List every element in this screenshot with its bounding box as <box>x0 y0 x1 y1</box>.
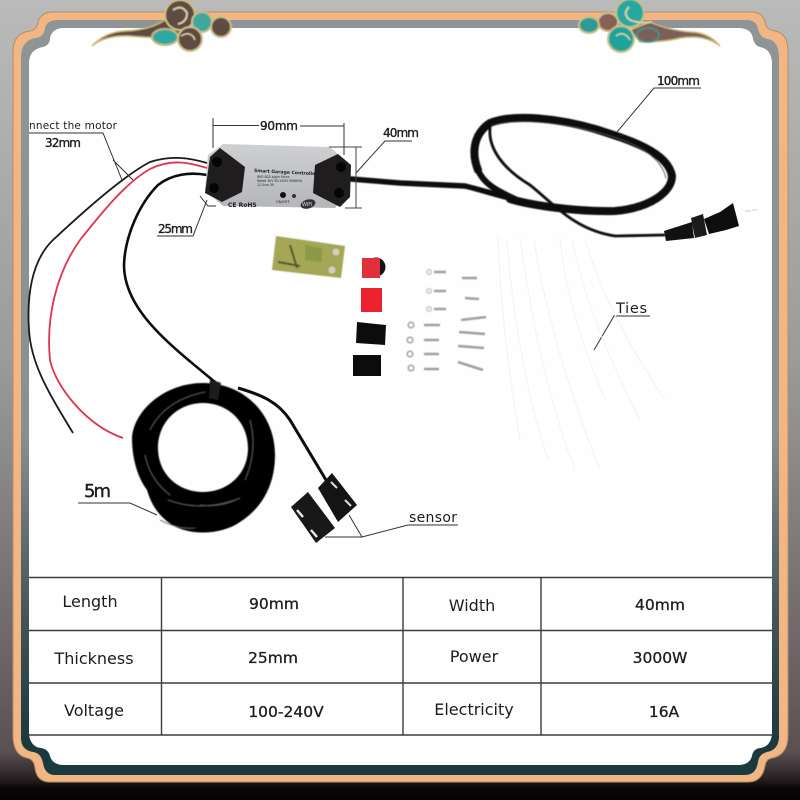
row: voltage and electricity: Voltage <box>64 701 124 720</box>
dimension: 100mm cord <box>617 74 701 132</box>
icon: wifi badge <box>300 198 316 210</box>
cable: sensor lead from coil <box>238 388 326 480</box>
accessory: adhesive pads <box>346 223 475 448</box>
dimension: 90mm <box>213 118 344 155</box>
cable: thin black motor wire <box>28 158 207 433</box>
row: thickness and power: Power <box>450 647 499 666</box>
dimension: 25mm <box>157 196 216 236</box>
row: voltage and electricity: Electricity <box>434 700 514 719</box>
accessory: screws <box>407 270 486 371</box>
device: smart garage controller: WiFi 802.b/g/n Force <box>257 175 289 179</box>
callout: 5m: 5m <box>84 481 111 502</box>
icon: power plug <box>664 203 757 241</box>
dimension: 100mm cord: 100mm <box>657 74 700 88</box>
cable: red motor wire <box>49 162 207 438</box>
callout: sensor <box>325 510 458 537</box>
ornament: right cloud <box>579 0 720 52</box>
row: thickness and power: 25mm <box>248 649 298 667</box>
callout: connect the motor 32mm: nnect the motor <box>29 120 118 132</box>
device: smart garage controller: CE RoHS <box>228 202 257 209</box>
accessory: brass bracket <box>272 236 345 278</box>
callout: ties: Ties <box>615 301 647 317</box>
callout: 5m <box>78 481 157 515</box>
ornament: left cloud <box>92 0 231 51</box>
device: button and indicator <box>280 192 286 198</box>
row: length and width <box>62 592 685 615</box>
device: right cap <box>313 154 351 207</box>
dimension: 40mm <box>329 126 419 208</box>
dimension: 40mm: 40mm <box>383 126 419 140</box>
magnetic sensor: part one <box>318 473 357 522</box>
row: thickness and power <box>53 647 687 668</box>
row: length and width: Width <box>449 596 495 615</box>
cable: black sensor lead <box>124 174 215 382</box>
device: left cap <box>205 148 245 202</box>
row: length and width: 90mm <box>249 595 299 613</box>
row: voltage and electricity: 100-240V <box>248 703 324 721</box>
device: smart garage controller: ON/OFF <box>276 200 290 204</box>
row: voltage and electricity: 16A <box>649 703 680 721</box>
magnetic sensor: part two <box>291 492 335 543</box>
cable: power cord <box>351 118 672 236</box>
callout: connect the motor 32mm: 32mm <box>45 136 81 150</box>
dimension: 90mm: 90mm <box>260 119 298 133</box>
accessory: cable ties <box>498 236 665 470</box>
row: length and width: 40mm <box>635 596 685 614</box>
cable coil: 5m <box>132 379 275 532</box>
table: specifications <box>29 577 772 735</box>
device: smart garage controller: Rated 3kV 90-240V 50/60Hz <box>257 179 302 183</box>
row: thickness and power: Thickness <box>53 649 134 668</box>
row: thickness and power: 3000W <box>633 649 687 667</box>
device: smart garage controller <box>205 144 351 210</box>
dimension: 25mm: 25mm <box>158 222 193 236</box>
callout: sensor: sensor <box>409 510 457 526</box>
callout: connect the motor 32mm <box>29 120 133 180</box>
table grid <box>29 577 772 735</box>
device: smart garage controller: WiFi <box>302 202 312 208</box>
accessory: red and black pads <box>353 258 386 376</box>
row: voltage and electricity <box>64 700 680 721</box>
device: label text: Smart Garage Controller <box>254 168 318 177</box>
callout: ties <box>594 301 650 350</box>
row: length and width: Length <box>62 592 118 611</box>
device: smart garage controller: 12.5cm 5V <box>257 183 275 187</box>
